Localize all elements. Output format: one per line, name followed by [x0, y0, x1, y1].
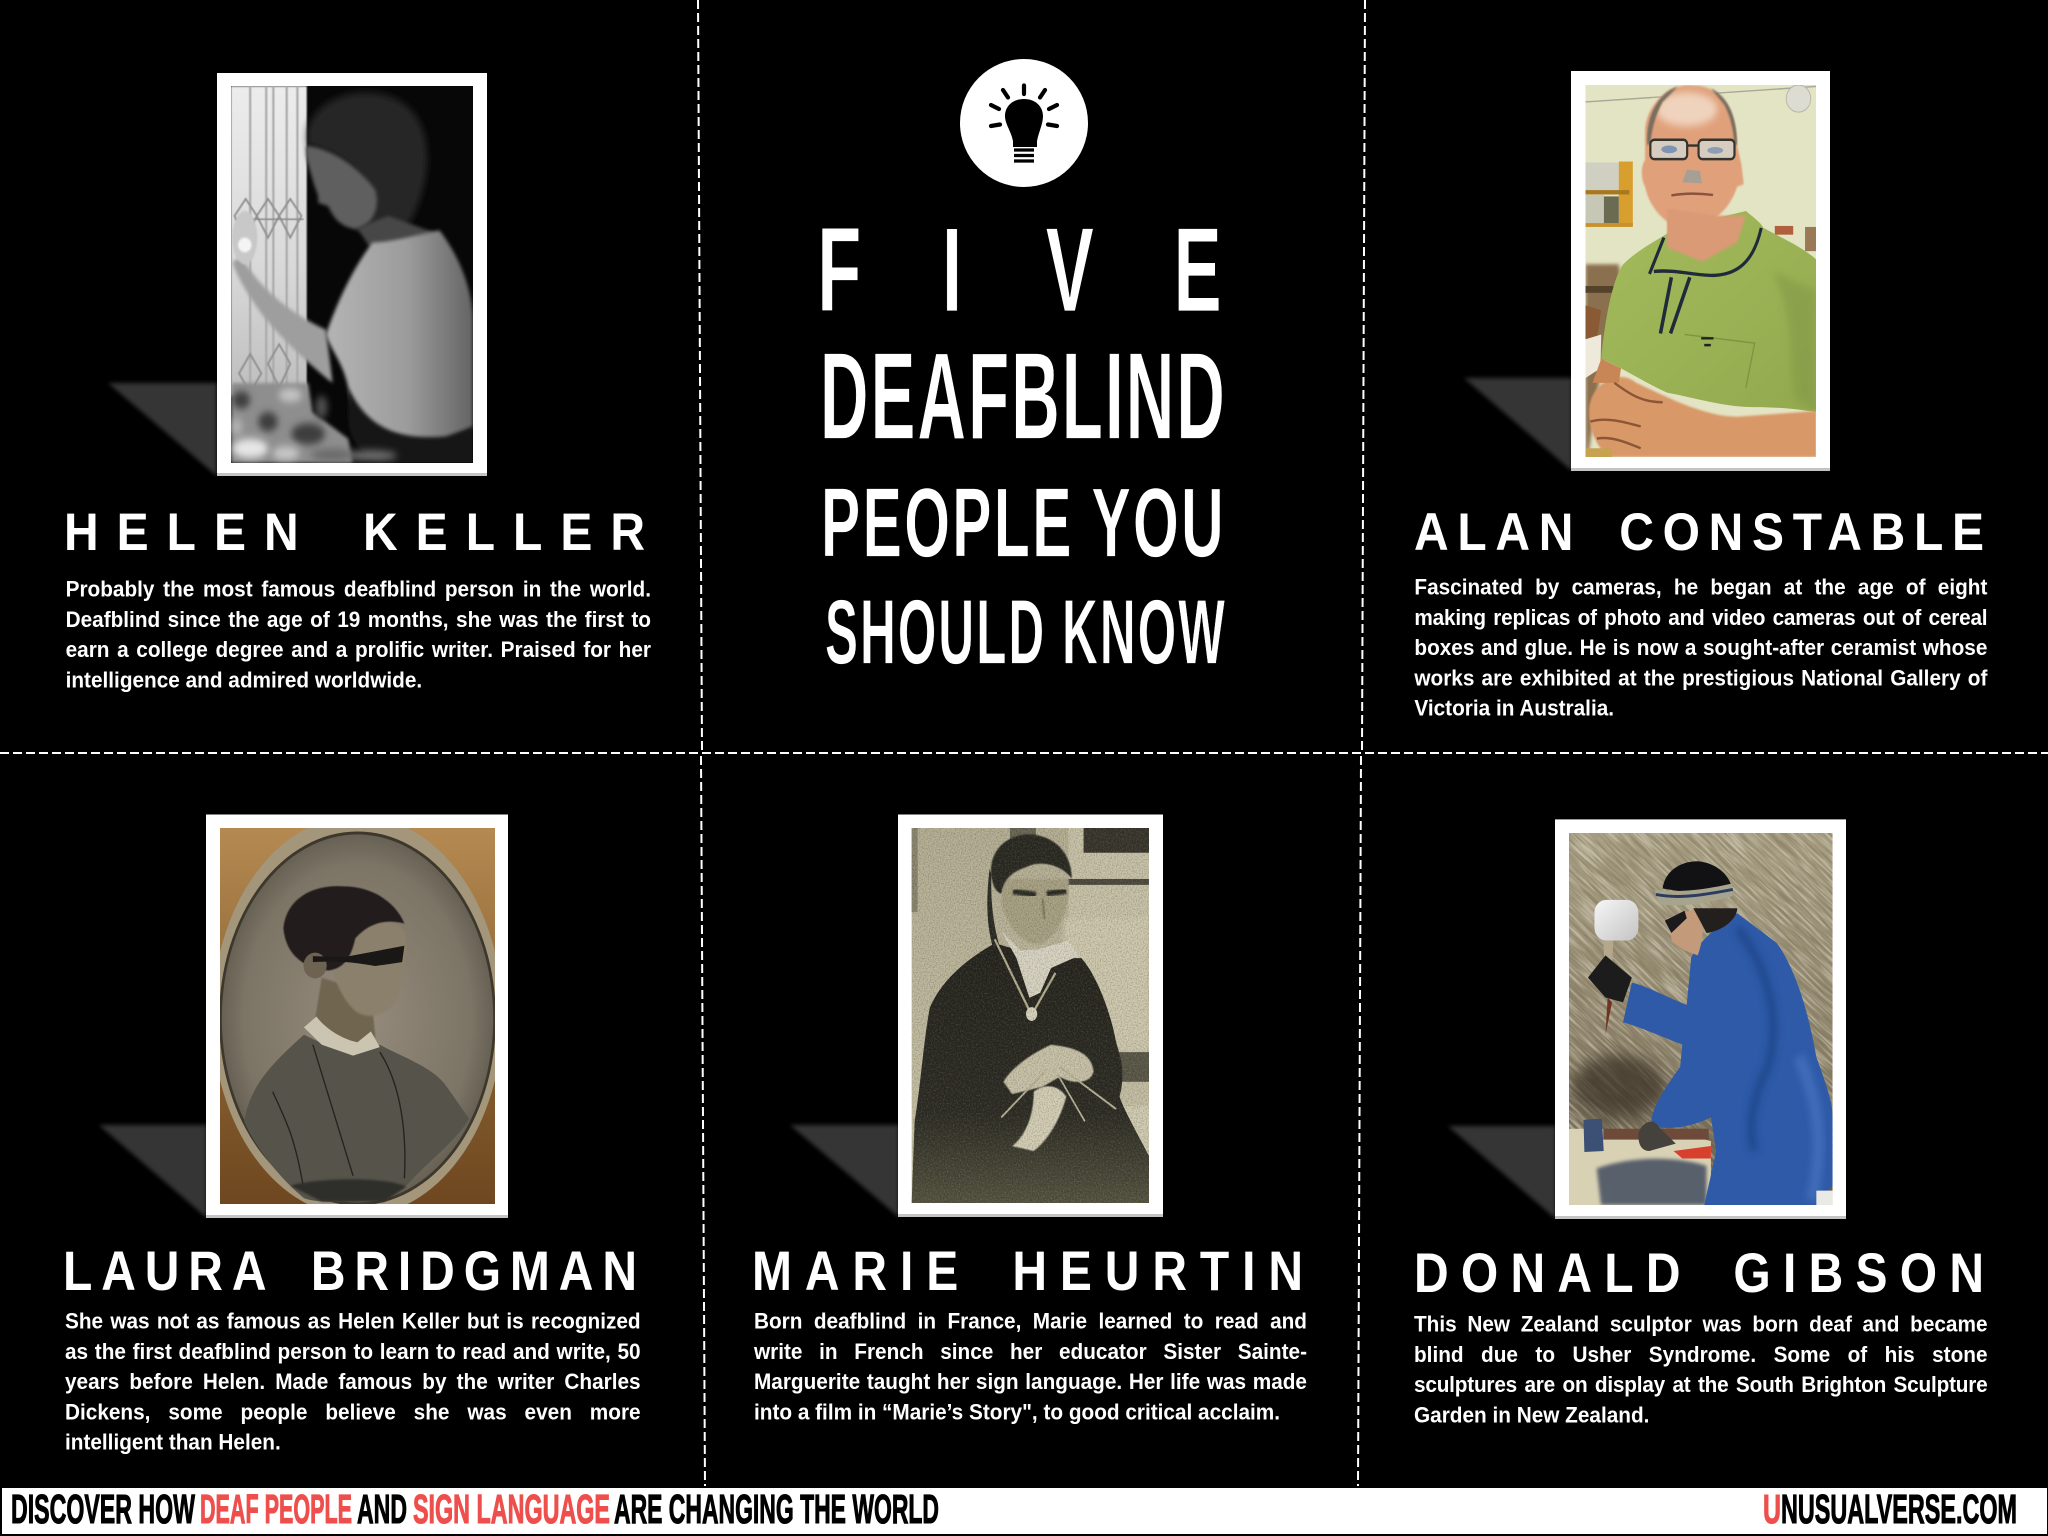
photo: Laura Bridgman: [206, 814, 508, 1218]
bio: Laura Bridgman: Dickens, some people believe she was even more: [65, 1400, 641, 1425]
footer text: and: AND: [357, 1486, 407, 1532]
panel: Laura Bridgman: [63, 814, 641, 1455]
panel: Helen Keller: [64, 73, 651, 693]
footer text: discover how: DISCOVER HOW: [11, 1486, 195, 1532]
bio: Donald Gibson: blind due to Usher Syndrome. Some of his stone: [1414, 1342, 1988, 1367]
photo: Alan Constable: [1571, 71, 1830, 471]
bio: Donald Gibson: sculptures are on display at the South Brighton Sculpture: [1414, 1373, 1988, 1397]
title: FIVE: FIVE: [817, 202, 1222, 336]
shadow under photo: [108, 383, 217, 476]
title: SHOULD KNOW: SHOULD KNOW: [825, 582, 1227, 684]
bio: Alan Constable: boxes and glue. He is now a sought-after ceramist whose: [1414, 636, 1987, 660]
shadow under photo: [790, 1125, 899, 1217]
bio: Alan Constable: Fascinated by cameras, he began at the age of eight: [1414, 575, 1987, 600]
bio: Marie Heurtin: Born deafblind in France, Marie learned to read and: [754, 1309, 1307, 1334]
title: DEAFBLIND: DEAFBLIND: [820, 328, 1227, 466]
panel: Donald Gibson: [1414, 819, 1988, 1428]
photo: Donald Gibson sculpting: [1337, 596, 2048, 1433]
title: PEOPLE YOU: PEOPLE YOU: [821, 468, 1226, 578]
footer text: site U: U: [1763, 1486, 1781, 1532]
bio: Helen Keller: Probably the most famous deafblind person in the world.: [66, 577, 651, 602]
bio: Alan Constable: works are exhibited at the prestigious National Gallery of: [1414, 666, 1987, 691]
bio: Laura Bridgman: years before Helen. Made famous by the writer Charles: [65, 1370, 641, 1394]
bio: Laura Bridgman: She was not as famous as Helen Keller but is recognized: [65, 1309, 641, 1334]
footer text: deaf people: DEAF PEOPLE: [200, 1486, 352, 1532]
bio: Marie Heurtin: Marguerite taught her sign language. Her life was made: [754, 1370, 1307, 1394]
icon: light bulb: [960, 59, 1088, 187]
bio: Helen Keller: intelligence and admired worldwide.: [66, 668, 422, 693]
bio: Donald Gibson: This New Zealand sculptor was born deaf and became: [1414, 1312, 1988, 1337]
name: Marie Heurtin: MARIE HEURTIN: [752, 1241, 1303, 1303]
bio: Donald Gibson: Garden in New Zealand.: [1414, 1403, 1649, 1428]
panel: Alan Constable: [1414, 71, 1988, 721]
panel: Marie Heurtin: [752, 814, 1307, 1425]
name: Alan Constable: ALAN CONSTABLE: [1414, 502, 1984, 562]
bio: Marie Heurtin: write in French since her educator Sister Sainte-: [754, 1339, 1307, 1364]
bio: Alan Constable: Victoria in Australia.: [1414, 696, 1614, 721]
name: Helen Keller: HELEN KELLER: [64, 502, 645, 562]
bio: Helen Keller: Deafblind since the age of 19 months, she was the first to: [66, 607, 651, 632]
bio: Helen Keller: earn a college degree and a prolific writer. Praised for her: [66, 638, 651, 662]
name: Donald Gibson: DONALD GIBSON: [1414, 1243, 1984, 1305]
shadow under photo: [1448, 1126, 1556, 1219]
bio: Marie Heurtin: into a film in “Marie’s Story", to good critical acclaim.: [754, 1400, 1280, 1425]
shadow under photo: [1464, 378, 1572, 471]
footer text: are changing the world: ARE CHANGING THE WORLD: [614, 1486, 939, 1532]
name: Laura Bridgman: LAURA BRIDGMAN: [63, 1241, 637, 1303]
bio: Laura Bridgman: as the first deafblind person to learn to read and write, 50: [65, 1339, 641, 1364]
photo: Helen Keller at window: [217, 73, 487, 476]
bio: Alan Constable: making replicas of photo and video cameras out of cereal: [1414, 605, 1987, 630]
bio: Donald Gibson: [1414, 1312, 1988, 1428]
bio: Alan Constable: [1414, 575, 1988, 721]
shadow under photo: [99, 1125, 207, 1218]
footer banner: [2, 1488, 2047, 1534]
footer text: sign language: SIGN LANGUAGE: [413, 1486, 610, 1532]
panel: title: [817, 59, 1227, 684]
bio: Helen Keller: [66, 577, 651, 693]
bio: Laura Bridgman: intelligent than Helen.: [65, 1430, 281, 1455]
bio: Laura Bridgman: [65, 1309, 641, 1455]
bio: Marie Heurtin: [754, 1309, 1307, 1425]
photo: Marie Heurtin: [898, 814, 1163, 1217]
